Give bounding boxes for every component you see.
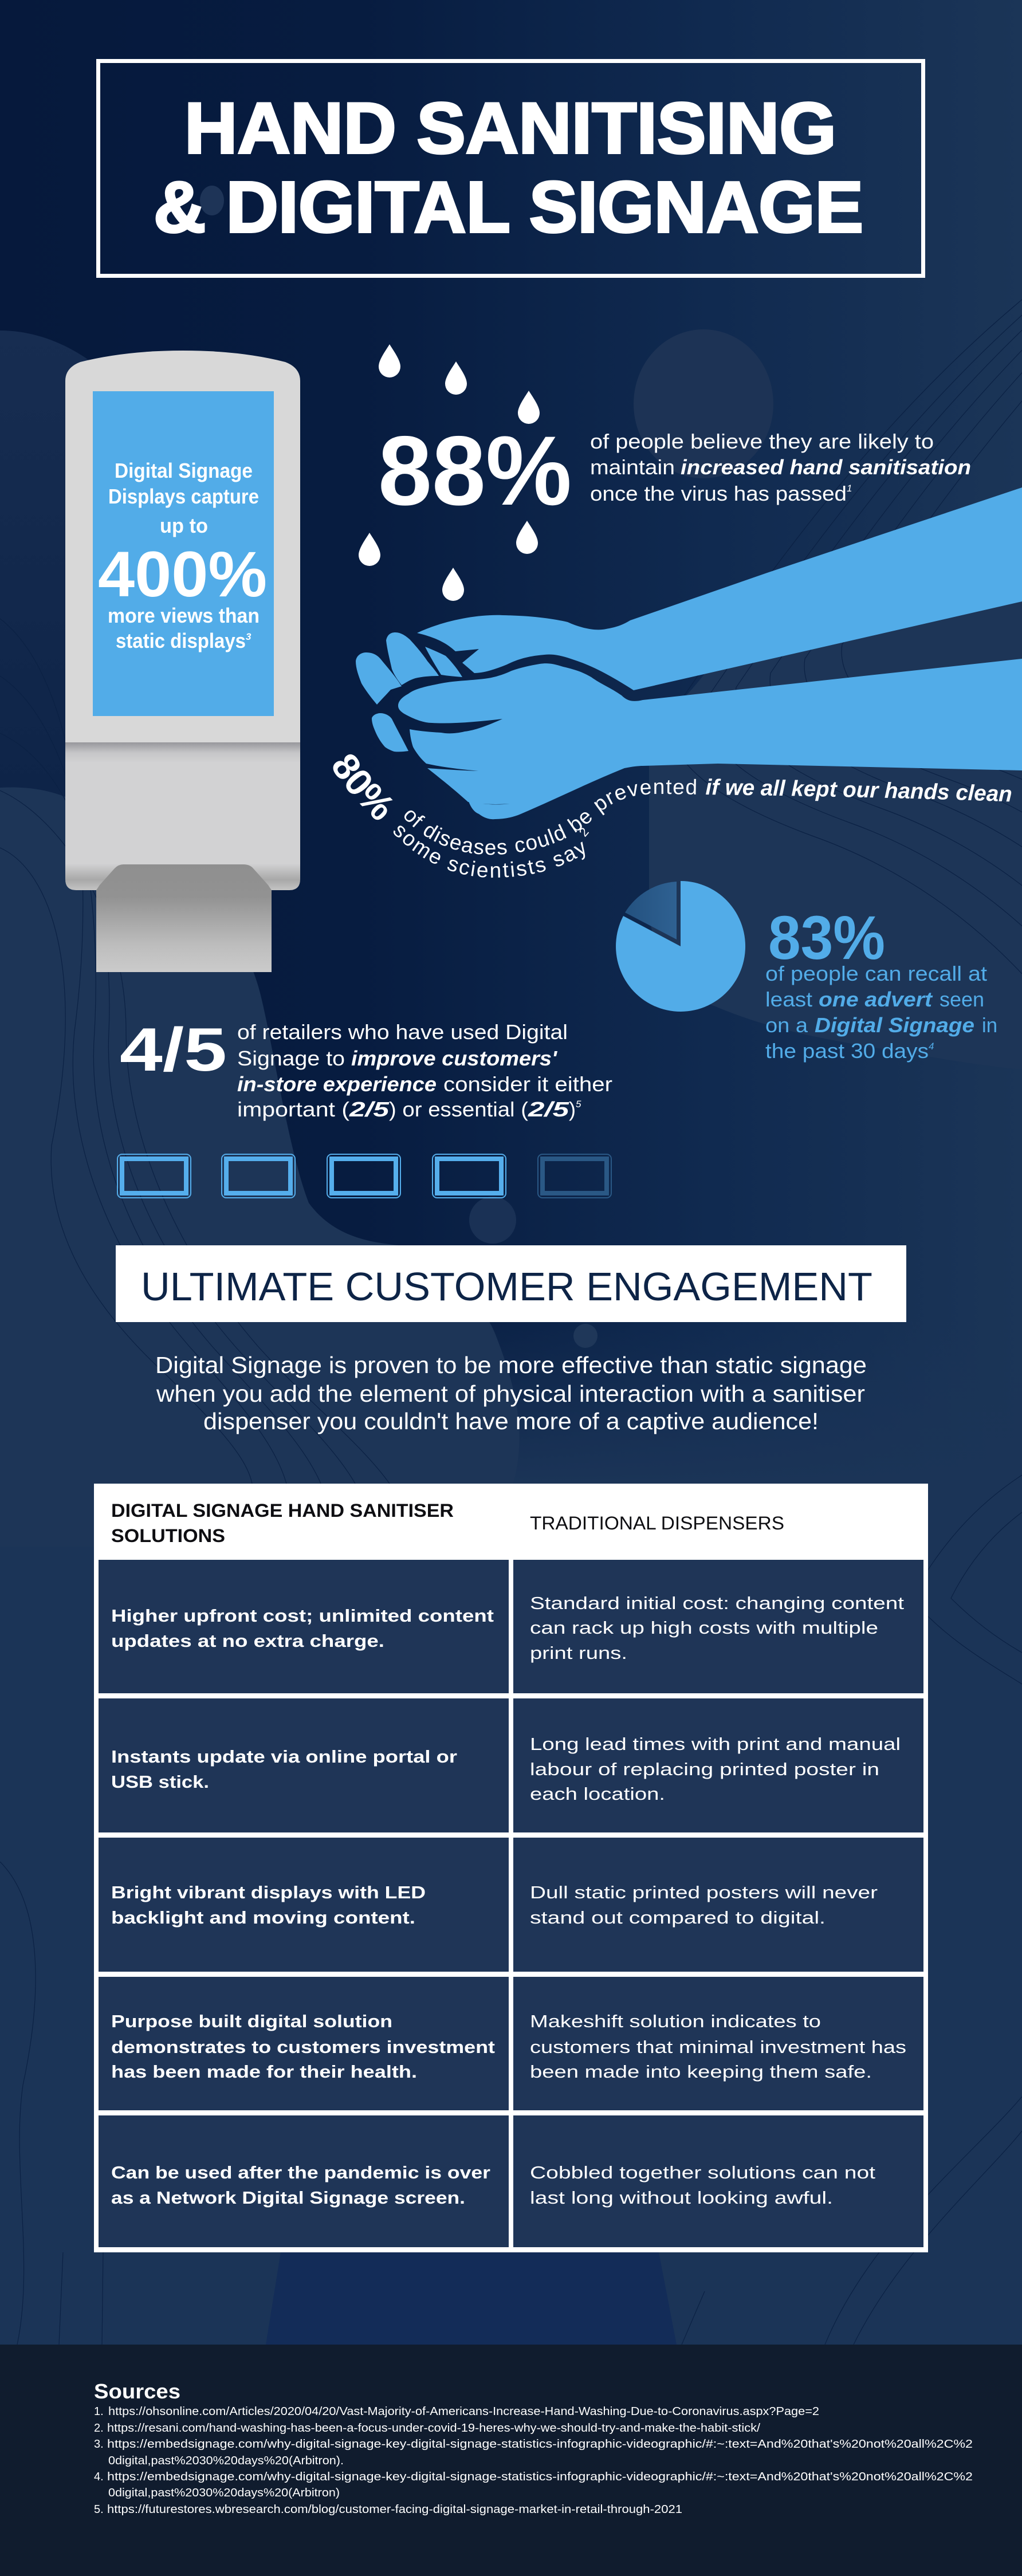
stat: 4/5: important (	[237, 1098, 349, 1121]
row 4: Makeshift solution indicates to	[530, 2011, 821, 2031]
second curve line: some scientists say	[393, 825, 585, 878]
title	[99, 61, 923, 276]
lower arm	[398, 659, 1022, 819]
stat: 4/5: 2/5	[528, 1098, 569, 1121]
pie chart: 83%	[616, 881, 745, 1012]
stat: 88%: 88%	[378, 416, 572, 526]
icon: water drops	[359, 344, 540, 601]
row 1: Higher upfront cost; unlimited content	[111, 1606, 494, 1626]
sources	[94, 2380, 973, 2516]
dispenser body	[65, 351, 300, 742]
stat: 83%: Digital Signage	[815, 1013, 974, 1037]
row 1: Standard initial cost: changing content	[530, 1593, 904, 1613]
dispenser lower housing	[65, 742, 300, 890]
row 2: Long lead times with print and manual	[530, 1734, 901, 1754]
row 4	[99, 1977, 923, 2110]
row 5: Cobbled together solutions can not	[530, 2162, 875, 2182]
row 1: updates at no extra charge.	[111, 1631, 384, 1651]
footnote 2: 2	[576, 825, 592, 839]
sources: 2.	[94, 2422, 104, 2435]
row 5: as a Network Digital Signage screen.	[111, 2188, 465, 2208]
pie small slice	[625, 882, 677, 939]
screen text	[98, 459, 267, 652]
stat: 83%: 83%	[768, 903, 885, 972]
row 3: Bright vibrant displays with LED	[111, 1882, 426, 1902]
stat: 4/5: Signage to	[237, 1047, 345, 1070]
stat: 83%: on a	[765, 1013, 808, 1037]
sources: 5.	[94, 2503, 104, 2516]
row 4: has been made for their health.	[111, 2062, 417, 2082]
screen text: up to	[160, 514, 208, 537]
intro paragraph: when you add the element of physical interaction with a sanitiser	[156, 1381, 865, 1407]
title: HAND SANITISING	[184, 88, 836, 168]
stat: 4/5: improve customers'	[351, 1047, 558, 1070]
bold curve line: if we all kept our hands clean	[706, 778, 1012, 802]
intro paragraph	[155, 1352, 867, 1434]
heading: ultimate customer engagement: ULTIMATE CUSTOMER ENGAGEMENT	[141, 1264, 872, 1309]
icon: washing hands	[356, 487, 1022, 819]
intro paragraph: Digital Signage is proven to be more effective than static signage	[155, 1352, 867, 1378]
stat: 4/5: )	[569, 1098, 576, 1121]
finger 3	[425, 647, 462, 677]
screen 5	[538, 1154, 611, 1198]
row 1: can rack up high costs with multiple	[530, 1618, 878, 1638]
pie large slice	[616, 881, 745, 1012]
row 4: been made into keeping them safe.	[530, 2062, 872, 2082]
stat: 88%: once the virus has passed	[590, 482, 847, 505]
screen text: Displays capture	[108, 485, 259, 508]
row 1: print runs.	[530, 1643, 627, 1663]
row 3	[99, 1838, 923, 1972]
stat: 83%: least	[765, 988, 812, 1011]
row 3: Dull static printed posters will never	[530, 1882, 878, 1902]
stat: 4/5: 2/5	[349, 1098, 390, 1121]
row 4: customers that minimal investment has	[530, 2037, 906, 2057]
finger 1	[386, 632, 439, 685]
sources: 1.	[94, 2405, 104, 2418]
comparison table	[94, 1484, 928, 2252]
icon row: five screens	[117, 1154, 611, 1198]
row 5: Can be used after the pandemic is over	[111, 2162, 490, 2182]
dispenser nozzle	[96, 864, 272, 972]
screen text: 3	[246, 631, 251, 642]
footer band	[0, 2345, 1022, 2576]
sources: https://ohsonline.com/Articles/2020/04/20/Vast-Majority-of-Americans-Increase-Hand-Washing-Due-to-Coronavirus.aspx?Page=2	[108, 2405, 819, 2418]
stat: 4/5: 5	[576, 1099, 581, 1110]
sources: 3.	[94, 2438, 104, 2451]
stat: 88%: of people believe they are likely to	[590, 430, 934, 453]
table header: SOLUTIONS	[111, 1525, 225, 1546]
dispenser	[65, 351, 300, 972]
row 2: Instants update via online portal or	[111, 1747, 457, 1767]
title: & DIGITAL SIGNAGE	[154, 167, 863, 247]
sources: 0digital,past%2030%20days%20(Arbitron)	[108, 2487, 340, 2499]
stat: 83%: of people can recall at	[765, 962, 987, 985]
row 2	[99, 1698, 923, 1832]
stat: 88%: 1	[847, 483, 852, 494]
stat: 88%: increased hand sanitisation	[681, 455, 971, 479]
stat: 83%	[765, 903, 997, 1063]
stat: 83%: in	[982, 1013, 997, 1037]
sources: https://embedsignage.com/why-digital-signage-key-digital-signage-statistics-infographic-videographic/#:~:text=And%20that's%20not%20all%2C%2	[107, 2438, 973, 2451]
stat: 4/5: ) or essential (	[389, 1098, 528, 1121]
curved text: 80% of diseases	[333, 754, 1012, 878]
table header	[111, 1500, 784, 1546]
stat: 83%: the past 30 days	[765, 1039, 929, 1063]
screen text: static displays	[116, 629, 246, 652]
row 2: USB stick.	[111, 1772, 209, 1792]
intro paragraph: dispenser you couldn't have more of a captive audience!	[203, 1408, 819, 1434]
stat: 4/5: consider it either	[443, 1072, 612, 1096]
main curve line: of diseases could be prevented	[404, 779, 696, 855]
table header: DIGITAL SIGNAGE HAND SANITISER	[111, 1500, 454, 1521]
finger 2	[356, 652, 402, 705]
stat: 4/5: in-store experience	[237, 1072, 437, 1096]
row 5	[99, 2115, 923, 2247]
stat: 88%	[378, 416, 971, 526]
row 3: backlight and moving content.	[111, 1908, 415, 1928]
stat: 88%: maintain	[590, 455, 675, 479]
sources: 0digital,past%2030%20days%20(Arbitron).	[108, 2455, 344, 2467]
sources: https://futurestores.wbresearch.com/blog/customer-facing-digital-signage-market-in-retail-through-2021	[107, 2503, 682, 2516]
finger 4	[372, 713, 408, 752]
row 4: Purpose built digital solution	[111, 2011, 392, 2031]
row 5: last long without looking awful.	[530, 2188, 833, 2208]
row 2: each location.	[530, 1784, 665, 1804]
screen text: 400%	[98, 538, 267, 610]
screen text: Digital Signage	[115, 459, 253, 482]
sources: Sources	[94, 2380, 180, 2403]
screen 2	[222, 1154, 295, 1198]
screen 4	[433, 1154, 506, 1198]
sources: 4.	[94, 2471, 104, 2483]
sources: https://embedsignage.com/why-digital-signage-key-digital-signage-statistics-infographic-videographic/#:~:text=And%20that's%20not%20all%2C%2	[107, 2471, 973, 2483]
stat: 4/5	[120, 1015, 612, 1121]
heading: ultimate customer engagement	[116, 1245, 906, 1322]
row 2: labour of replacing printed poster in	[530, 1759, 879, 1779]
stat: 83%: one advert	[819, 988, 933, 1011]
table header: TRADITIONAL DISPENSERS	[530, 1513, 784, 1533]
upper arm	[417, 487, 1022, 690]
screen text: more views than	[108, 604, 260, 627]
sources: https://resani.com/hand-washing-has-been-a-focus-under-covid-19-heres-why-we-should-try-and-make-the-habit-stick/	[107, 2422, 760, 2435]
stat: 83%: seen	[940, 988, 984, 1011]
stat: 4/5: 4/5	[120, 1015, 227, 1084]
dispenser screen	[93, 391, 274, 716]
screen 1	[117, 1154, 191, 1198]
stat: 83%: 4	[929, 1041, 934, 1052]
row 3: stand out compared to digital.	[530, 1908, 826, 1928]
row 4: demonstrates to customers investment	[111, 2037, 495, 2057]
screen 3	[327, 1154, 400, 1198]
stat: 4/5: of retailers who have used Digital	[237, 1020, 568, 1044]
row 1	[99, 1560, 923, 1693]
table frame	[94, 1484, 928, 2252]
80%: 80%	[333, 754, 393, 820]
